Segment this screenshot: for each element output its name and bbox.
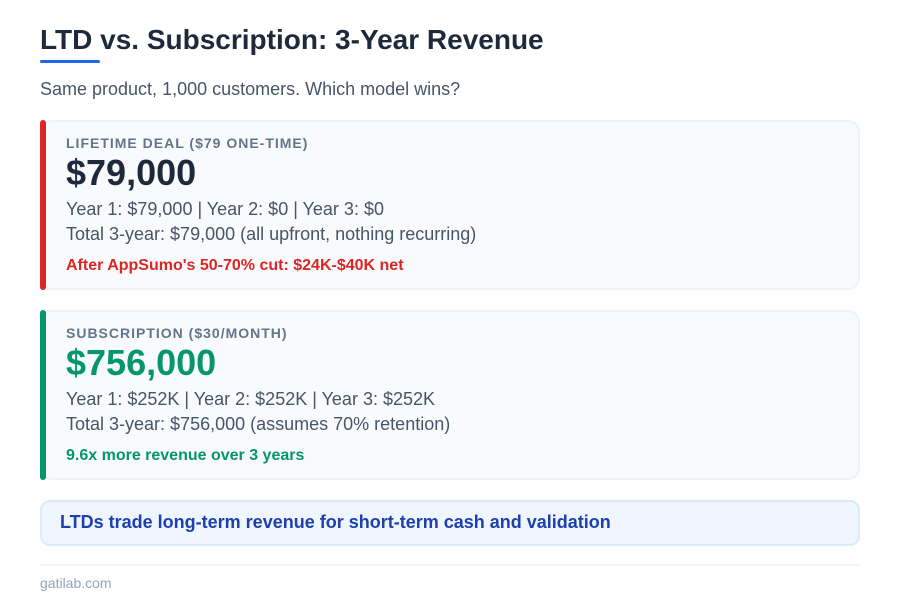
panel: lifetime deal — [40, 120, 860, 290]
lifetime deal details: Year 1: $79,000 | Year 2: $0 | Year 3: $0 — [66, 199, 384, 219]
footer source: gatilab.com — [40, 575, 112, 591]
subscription label: SUBSCRIPTION ($30/MONTH) — [66, 325, 288, 341]
title accent underline — [40, 60, 100, 63]
callout — [40, 500, 860, 546]
footer divider — [40, 564, 860, 566]
subscription details — [66, 389, 450, 434]
lifetime deal details — [66, 199, 476, 244]
subscription details: Total 3-year: $756,000 (assumes 70% retention) — [66, 414, 450, 434]
subscription revenue: $756,000 — [66, 342, 216, 383]
lifetime deal label: LIFETIME DEAL ($79 ONE-TIME) — [66, 135, 308, 151]
subscription multiple note: 9.6x more revenue over 3 years — [66, 447, 304, 464]
subscription details: Year 1: $252K | Year 2: $252K | Year 3: $252K — [66, 389, 435, 409]
subtitle: Same product, 1,000 customers. Which model wins? — [40, 79, 460, 99]
title: LTD vs. Subscription: 3-Year Revenue — [40, 24, 544, 55]
callout text: LTDs trade long-term revenue for short-term cash and validation — [60, 512, 611, 532]
lifetime deal revenue: $79,000 — [66, 152, 196, 193]
panel: subscription — [40, 310, 860, 480]
lifetime deal details: Total 3-year: $79,000 (all upfront, nothing recurring) — [66, 224, 476, 244]
lifetime deal net note: After AppSumo's 50-70% cut: $24K-$40K net — [66, 257, 404, 274]
